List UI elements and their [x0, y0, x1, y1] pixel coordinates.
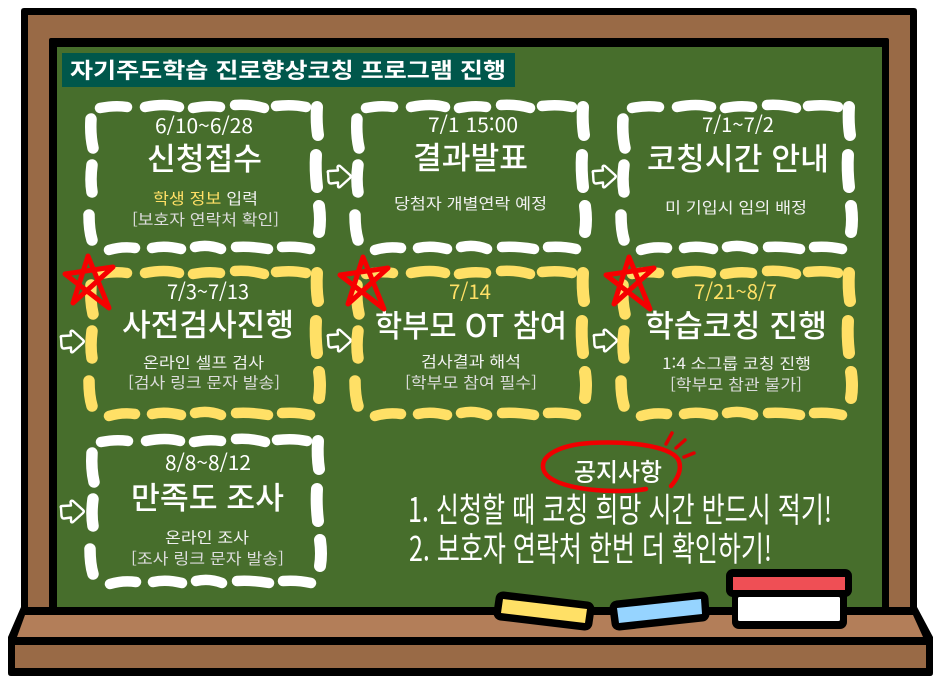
panel: 만족도 조사: 만족도 조사 [131, 473, 284, 518]
panel: 신청접수: [보호자 연락처 확인] [132, 208, 279, 230]
panel: 학습코칭 진행 [621, 271, 852, 416]
panel: 결과발표: 결과발표 [413, 133, 528, 178]
panel: 학부모 OT 참여: 학부모 OT 참여 [375, 301, 567, 346]
notice badge: 공지사항 [574, 453, 662, 489]
arrow: 신청접수 to 결과발표 [328, 166, 351, 187]
panel: 학부모 OT 참여 [355, 271, 586, 416]
panel: 코칭시간 안내: 코칭시간 안내 [647, 134, 829, 179]
icon: eraser [726, 569, 852, 629]
panel: 사전검사진행: 7/3~7/13 [167, 276, 249, 305]
notice badge [543, 433, 694, 491]
panel: 만족도 조사: 온라인 조사 [165, 526, 249, 548]
panel: 학습코칭 진행: 7/21~8/7 [694, 276, 777, 305]
panel: 신청접수 [89, 105, 320, 250]
arrow: 학부모 OT 참여 to 학습코칭 진행 [594, 330, 617, 351]
panel: 만족도 조사: 8/8~8/12 [165, 447, 251, 476]
panel: 결과발표: 당첨자 개별연락 예정 [394, 192, 547, 214]
title banner: 자기주도학습 진로향상코칭 프로그램 진행 [70, 54, 506, 85]
panel: 학습코칭 진행: 1:4 소그룹 코칭 진행 [662, 352, 811, 374]
notice text [408, 483, 832, 571]
panel: 사전검사진행: 온라인 셀프 검사 [143, 351, 264, 373]
panel: 학습코칭 진행: 학습코칭 진행 [645, 301, 827, 346]
panel: 사전검사진행 [89, 271, 320, 416]
panel: 결과발표: 7/1 15:00 [428, 109, 518, 138]
panel: 신청접수: 학생 정보 입력 [153, 187, 258, 209]
panel: 사전검사진행: 사전검사진행 [122, 300, 294, 345]
icon: red star 1 [65, 256, 113, 308]
panel: 코칭시간 안내 [621, 105, 852, 250]
panel: 만족도 조사 [90, 439, 321, 584]
arrow: to 만족도 조사 [61, 501, 84, 522]
notice text: 2. 보호자 연락처 한번 더 확인하기! [409, 522, 772, 571]
arrow: to 사전검사진행 [61, 331, 84, 352]
panel: 학습코칭 진행: [학부모 참관 불가] [670, 373, 802, 395]
panel: 만족도 조사: [조사 링크 문자 발송] [131, 547, 284, 569]
arrow: 사전검사진행 to 학부모 OT 참여 [328, 330, 351, 351]
panel: 코칭시간 안내: 7/1~7/2 [702, 109, 774, 138]
panel: 학부모 OT 참여: [학부모 참여 필수] [405, 371, 537, 393]
icon: yellow chalk [501, 599, 587, 623]
panel: 학부모 OT 참여: 검사결과 해석 [421, 350, 521, 372]
panel: 신청접수: 6/10~6/28 [155, 110, 253, 139]
arrow: 결과발표 to 코칭시간 안내 [593, 166, 616, 187]
panel: 코칭시간 안내: 미 기입시 임의 배정 [665, 196, 807, 218]
panel: 사전검사진행: [검사 링크 문자 발송] [128, 371, 280, 393]
panel: 학부모 OT 참여: 7/14 [449, 276, 491, 305]
icon: red star 3 [606, 257, 654, 309]
icon: blue chalk [617, 599, 702, 623]
icon: red star 2 [340, 257, 388, 309]
panel: 신청접수: 신청접수 [147, 134, 262, 179]
panel: 결과발표 [355, 105, 586, 250]
